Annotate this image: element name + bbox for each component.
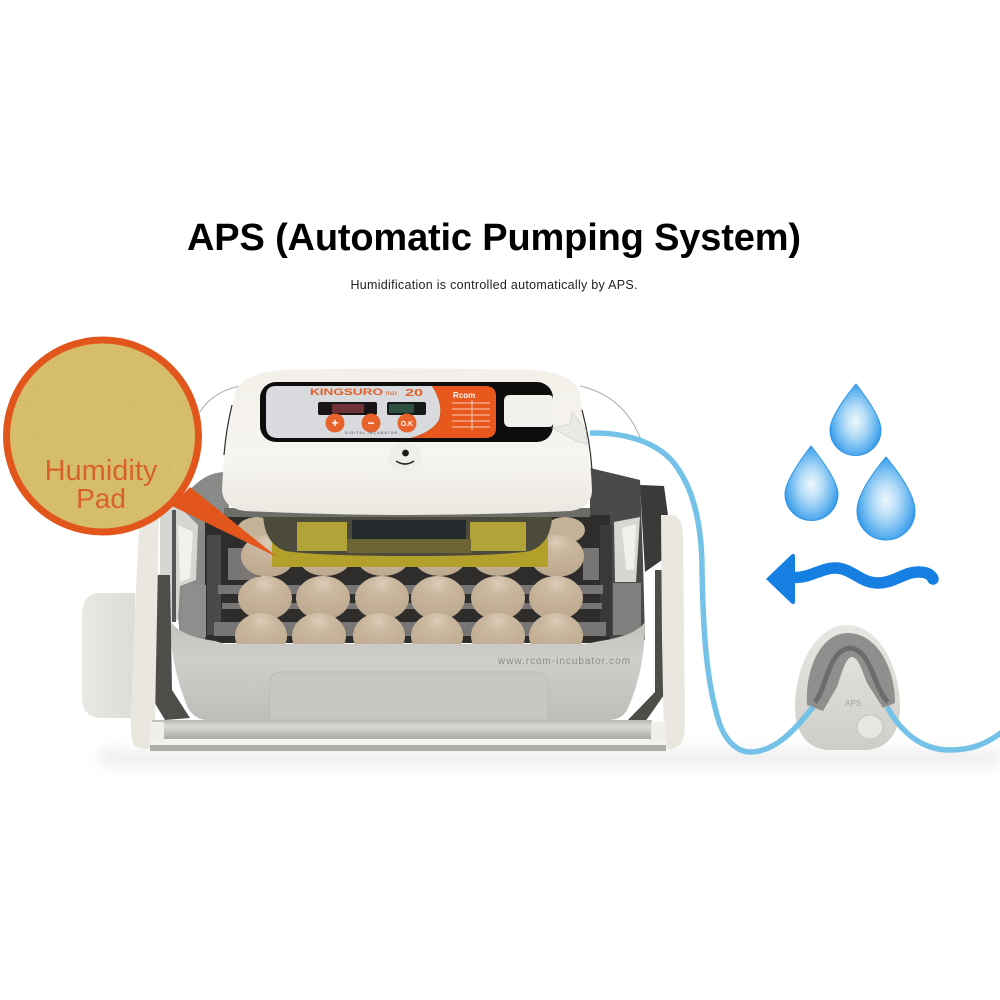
right strut <box>626 570 664 722</box>
displays <box>318 402 377 415</box>
back eggs above pad <box>237 517 277 543</box>
front row eggs <box>235 613 583 659</box>
rcom logo: Rcom <box>453 391 475 400</box>
APS pump <box>795 625 900 750</box>
viewing dome <box>263 514 552 556</box>
side tray blocks <box>182 585 206 637</box>
orange buttons: O.K <box>401 421 413 428</box>
air vent <box>388 442 422 472</box>
humidity pad callout: Humidity <box>45 455 158 487</box>
bottom bar <box>150 739 666 746</box>
tub recess <box>270 672 548 720</box>
transparent dome outline <box>200 386 642 442</box>
tub <box>170 620 645 720</box>
humidity pad callout <box>6 340 198 532</box>
orange section <box>411 386 496 438</box>
egg rails <box>214 548 606 636</box>
APS pump: APS <box>845 699 861 708</box>
brand text: KINGSURO <box>310 387 383 398</box>
top row eggs <box>241 535 584 577</box>
humidity pad callout: Pad <box>76 483 126 514</box>
right dark wall <box>590 468 645 640</box>
left clear wall <box>160 505 198 622</box>
subtitle: Humidification is controlled automatically by APS. <box>350 278 638 292</box>
control panel grey face <box>266 386 440 438</box>
digital incubator label: DIGITAL INCUBATOR <box>345 431 397 435</box>
orange buttons <box>326 414 416 432</box>
orange table <box>452 400 490 430</box>
bar feet <box>150 722 164 742</box>
water drops <box>785 384 915 540</box>
right clear wall <box>614 517 640 582</box>
middle row eggs <box>238 576 583 620</box>
incubator <box>82 368 685 751</box>
water tube <box>590 433 813 752</box>
control panel black frame <box>260 382 553 442</box>
left grey wall <box>176 472 235 640</box>
lid <box>222 368 592 515</box>
floor shadow <box>100 750 1000 766</box>
orange buttons: + <box>331 416 339 430</box>
flow arrow <box>766 554 933 604</box>
orange buttons: − <box>367 416 375 430</box>
right arm <box>661 515 685 749</box>
title: APS (Automatic Pumping System) <box>187 217 801 259</box>
right dark block <box>640 485 668 572</box>
inner tray <box>205 515 610 643</box>
tube clip <box>552 412 587 444</box>
pump outlet tube <box>887 707 1000 750</box>
callout pointer <box>172 487 277 557</box>
incubator: 20 <box>405 388 424 399</box>
side tooth strips <box>207 535 221 635</box>
incubator: max <box>386 391 397 397</box>
front bar <box>152 720 652 739</box>
humidity pad in place <box>272 537 548 567</box>
left strut <box>153 575 190 720</box>
port sticker <box>504 395 553 427</box>
left cylinder <box>82 593 135 718</box>
web address: www.rcom-incubator.com <box>497 656 630 667</box>
left arm <box>131 510 159 749</box>
